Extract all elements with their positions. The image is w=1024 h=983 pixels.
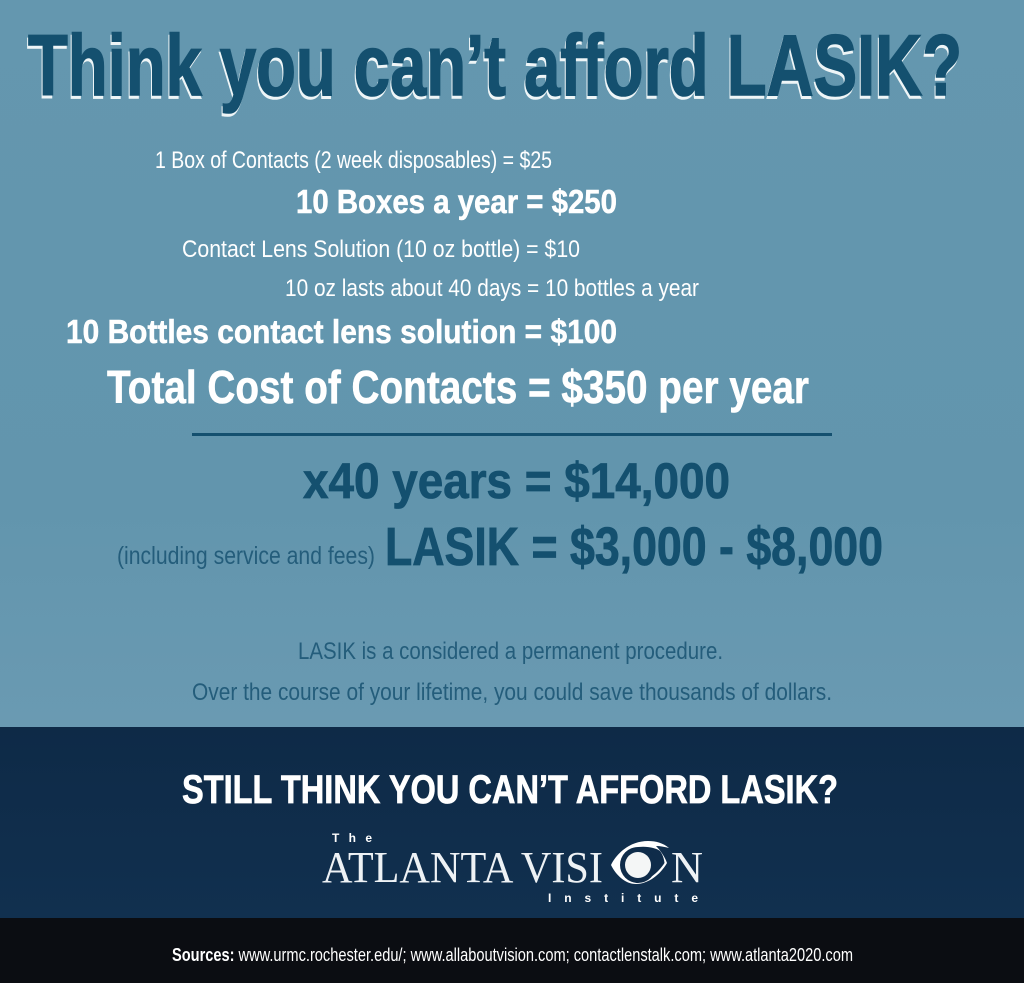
- panel: navy call to action: [0, 727, 1024, 918]
- logo: Atlanta Vision Institute: The: [332, 831, 372, 845]
- logo: Atlanta Vision Institute: [322, 831, 703, 905]
- panel: contact lens costs: [66, 147, 809, 413]
- text: sources: Sources: www.urmc.rochester.edu/; www.allaboutvision.com; contactlenstalk.com; www.atlanta2020.com: [172, 945, 853, 965]
- text: lasik cost: LASIK = $3,000 - $8,000: [385, 517, 883, 577]
- text: lens solution: Contact Lens Solution (10 oz bottle) = $10: [182, 236, 580, 263]
- text: fees note: (including service and fees): [117, 542, 375, 570]
- text: total cost: Total Cost of Contacts = $350 per year: [107, 361, 809, 413]
- logo: Atlanta Vision Institute: ATLANTA VISI: [322, 843, 603, 892]
- text: boxes a year: 10 Boxes a year = $250: [296, 183, 617, 220]
- heading: still think: STILL THINK YOU CAN’T AFFORD LASIK?: [182, 768, 838, 812]
- text: lifetime savings: Over the course of your lifetime, you could save thousands of dollars.: [192, 679, 832, 706]
- text: bottles of solution: 10 Bottles contact lens solution = $100: [66, 313, 617, 350]
- icon: eye: [611, 841, 669, 884]
- text: forty year cost: x40 years = $14,000: [303, 453, 730, 509]
- panel: comparison: [117, 453, 883, 706]
- text: box of contacts: 1 Box of Contacts (2 week disposables) = $25: [155, 147, 552, 174]
- panel: blue background: [0, 0, 1024, 727]
- logo: Atlanta Vision Institute: Institute: [548, 891, 698, 905]
- panel: sources footer: [0, 918, 1024, 983]
- text: permanent procedure: LASIK is a considered a permanent procedure.: [298, 638, 723, 665]
- logo: Atlanta Vision Institute: N: [671, 843, 703, 892]
- text: bottle duration: 10 oz lasts about 40 days = 10 bottles a year: [285, 275, 699, 302]
